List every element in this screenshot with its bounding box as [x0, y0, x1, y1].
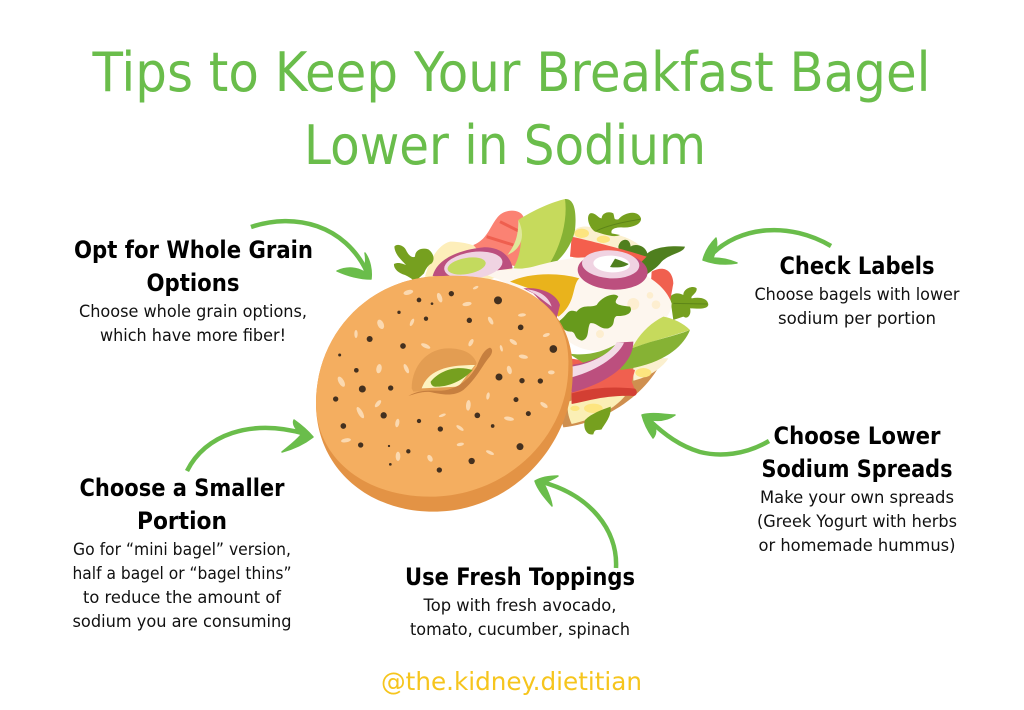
arrow: smaller portion [187, 420, 313, 471]
avocado top [507, 199, 576, 270]
tip: lower sodium spreads: or homemade hummus) [758, 536, 956, 555]
avocado lower [568, 317, 690, 370]
tip: check labels: sodium per portion [778, 309, 936, 328]
tip: whole grain [74, 236, 313, 345]
tip: whole grain: which have more fiber! [100, 326, 286, 345]
poppy seeds [333, 291, 557, 473]
salmon and tomato [473, 211, 673, 404]
tip: smaller portion: half a bagel or “bagel thins” [72, 564, 292, 583]
tip: smaller portion: to reduce the amount of [83, 588, 282, 607]
tip: smaller portion: Portion [137, 507, 227, 535]
tip: fresh toppings: Use Fresh Toppings [405, 563, 635, 591]
egg white and yolk [473, 257, 672, 351]
bagel top face [316, 276, 568, 497]
tip: fresh toppings: Top with fresh avocado, [423, 596, 616, 615]
arrow: toppings [535, 476, 616, 568]
sesame seeds [336, 285, 555, 463]
bagel hole [408, 348, 492, 396]
tip: fresh toppings [405, 563, 635, 639]
tip: smaller portion: sodium you are consuming [72, 612, 292, 631]
bagel body [316, 276, 573, 512]
tip: whole grain: Choose whole grain options, [79, 302, 307, 321]
tip: check labels [754, 252, 960, 328]
tip: lower sodium spreads: Sodium Spreads [762, 455, 952, 483]
tip: whole grain: Opt for Whole Grain [74, 236, 313, 264]
tip: lower sodium spreads: (Greek Yogurt with herbs [757, 512, 957, 531]
tip: smaller portion: Choose a Smaller [80, 474, 285, 502]
arrow: whole grain [251, 221, 371, 279]
tip: check labels: Choose bagels with lower [754, 285, 960, 304]
arrow: spreads [642, 414, 769, 454]
title [92, 41, 930, 177]
title: Lower in Sodium [304, 114, 706, 177]
handle credit: @the.kidney.dietitian [381, 667, 642, 696]
tip: check labels: Check Labels [780, 252, 934, 280]
illustration: bagel sandwich [316, 199, 708, 512]
tip: fresh toppings: tomato, cucumber, spinach [410, 620, 630, 639]
red onion rings [433, 247, 649, 393]
tip: lower sodium spreads: Choose Lower [774, 422, 941, 450]
tip: whole grain: Options [146, 269, 240, 297]
centre arugula leaf [558, 295, 631, 341]
tip: lower sodium spreads [757, 422, 957, 555]
arrow: check labels [703, 230, 831, 264]
tip: lower sodium spreads: Make your own spreads [760, 488, 954, 507]
tip: smaller portion: Go for “mini bagel” version, [73, 540, 291, 559]
tip: smaller portion [72, 474, 292, 631]
arugula leaves [394, 212, 708, 435]
title: Tips to Keep Your Breakfast Bagel [92, 41, 930, 104]
cream fillings and bottom crust [425, 226, 668, 427]
